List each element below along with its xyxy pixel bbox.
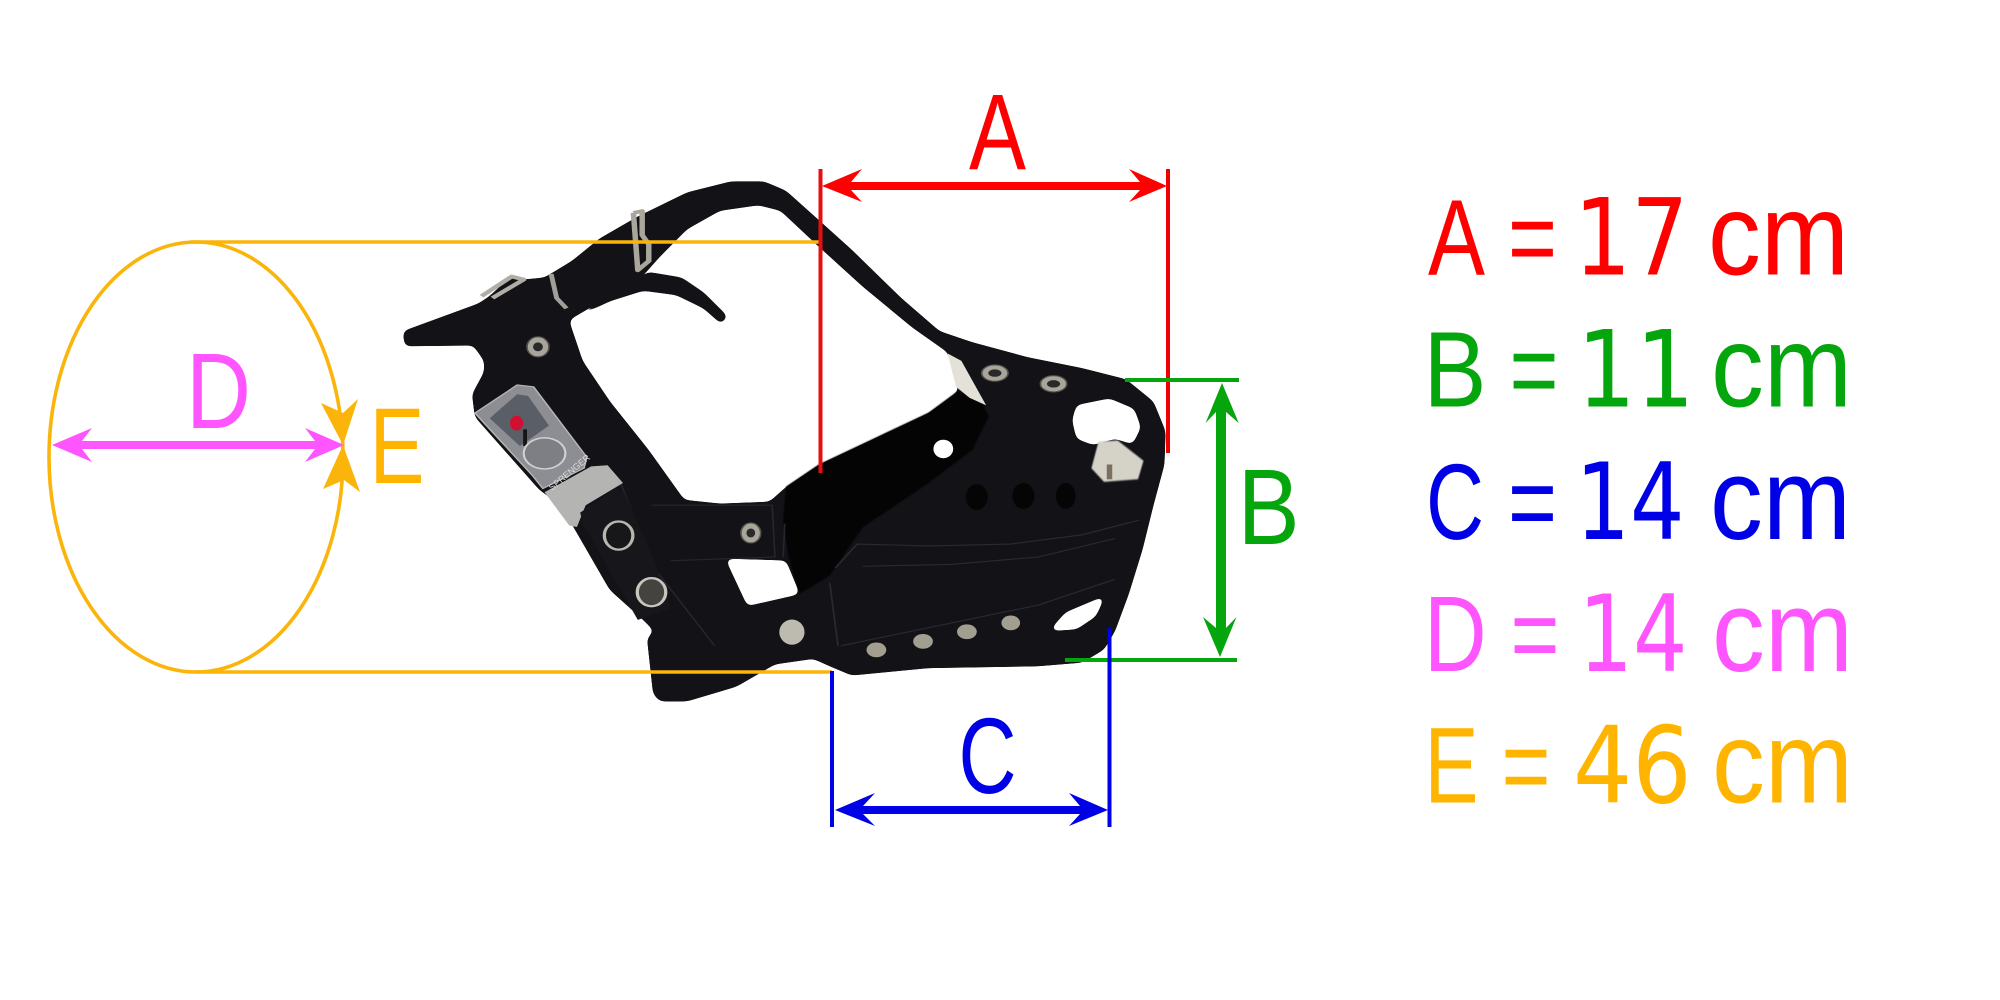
legend row: C = 14 cm: 14 (1576, 441, 1684, 564)
silver clip (545, 465, 623, 527)
dimension C: blue width arrow and extension lines (830, 628, 1112, 827)
small buckle and keeper (481, 277, 524, 298)
muzzle silhouette (403, 181, 1165, 701)
legend row: A = 17 cm (1428, 169, 1849, 299)
side strap edge (569, 483, 785, 646)
breathing holes (966, 484, 988, 510)
legend row: D = 14 cm: = (1510, 573, 1560, 694)
label E: E (370, 385, 424, 506)
legend row: E = 46 cm (1424, 698, 1853, 828)
legend row: B = 11 cm: B (1424, 308, 1486, 430)
eyelets (527, 337, 1067, 543)
silver lock plate (475, 385, 587, 489)
upper nostril opening (1072, 399, 1141, 445)
lower vent opening (1049, 596, 1105, 631)
legend row: A = 17 cm: cm (1708, 169, 1849, 299)
legend row: A = 17 cm: = (1508, 176, 1557, 297)
inner muzzle dark lining (783, 390, 989, 594)
dimension A: red width arrow and extension lines (818, 169, 1170, 473)
legend row: E = 46 cm: 46 (1573, 705, 1692, 828)
lower strap window (726, 559, 800, 606)
lock plate logo ring (524, 438, 565, 469)
legend row: E = 46 cm: = (1502, 705, 1550, 826)
main window opening (569, 206, 959, 503)
silver nose bracket (1091, 440, 1144, 482)
label A: A (969, 71, 1026, 192)
legend row: A = 17 cm: A (1428, 176, 1485, 297)
side hole (933, 440, 953, 458)
legend row: B = 11 cm (1424, 302, 1852, 432)
legend row: E = 46 cm: cm (1712, 698, 1853, 828)
legend row: D = 14 cm (1424, 566, 1853, 696)
legend row: C = 14 cm: C (1426, 441, 1484, 562)
legend row: B = 11 cm: cm (1711, 302, 1852, 432)
lock plate engraving: SPRENGER (547, 452, 592, 493)
dimension D: pink arrow across ellipse (52, 428, 344, 462)
legend row: A = 17 cm: 17 (1574, 176, 1688, 299)
strap tail (561, 272, 728, 326)
dimension B: green height arrow and extension lines (1065, 378, 1239, 662)
legend row: D = 14 cm: 14 (1578, 573, 1688, 696)
legend row: E = 46 cm: E (1424, 705, 1478, 826)
leather panel stitching (830, 520, 1140, 646)
legend row: C = 14 cm: cm (1710, 434, 1851, 564)
top buckle (633, 211, 649, 270)
circumference ellipse E with guide lines (49, 242, 832, 672)
label B: B (1238, 446, 1300, 567)
legend row: B = 11 cm: 11 (1577, 308, 1694, 432)
label D: D (186, 330, 251, 451)
legend row: D = 14 cm: cm (1712, 566, 1853, 696)
rivets (604, 521, 633, 550)
muzzle photo illustration (403, 181, 1165, 701)
legend row: D = 14 cm: D (1424, 573, 1487, 694)
legend row: B = 11 cm: = (1510, 308, 1558, 430)
label C: C (958, 695, 1016, 816)
dimension E: yellow pinch arrows (321, 399, 360, 492)
legend row: C = 14 cm (1426, 434, 1851, 564)
white lining under strap (948, 354, 986, 405)
legend row: C = 14 cm: = (1508, 441, 1557, 562)
